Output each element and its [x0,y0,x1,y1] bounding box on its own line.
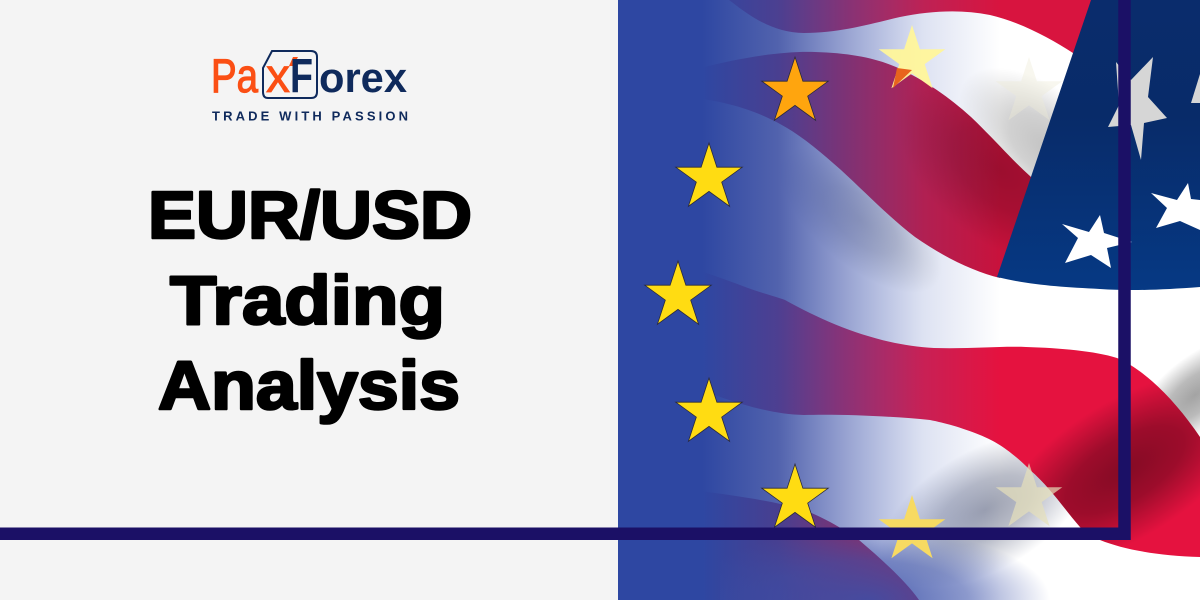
merged EU and US flag [618,0,1200,600]
red stripe upper [720,52,1031,278]
red stripe lower [618,470,919,600]
title: Analysis [158,347,460,424]
logo wordmark: Pa [211,49,259,102]
EU blue overlay [618,0,1018,600]
title: EUR/USD [148,178,472,253]
lower blue glow [720,470,1050,600]
logo: PaxForex [211,49,408,124]
left panel background [0,0,618,600]
logo frame [263,51,317,98]
shading on white stripes [930,37,1170,263]
title [148,178,472,424]
logo: PaxForex: F [290,50,313,103]
US stars [1062,57,1200,268]
white stripes base [618,0,1200,600]
red stripe middle [720,278,1200,557]
title: Trading [170,262,445,339]
logo tagline: TRADE WITH PASSION [212,108,408,124]
logo: PaxForex: x [266,50,290,103]
logo: PaxForex: orex [319,54,408,101]
US canton [997,0,1200,290]
EU stars [645,57,828,527]
red stripe top [618,0,1100,70]
